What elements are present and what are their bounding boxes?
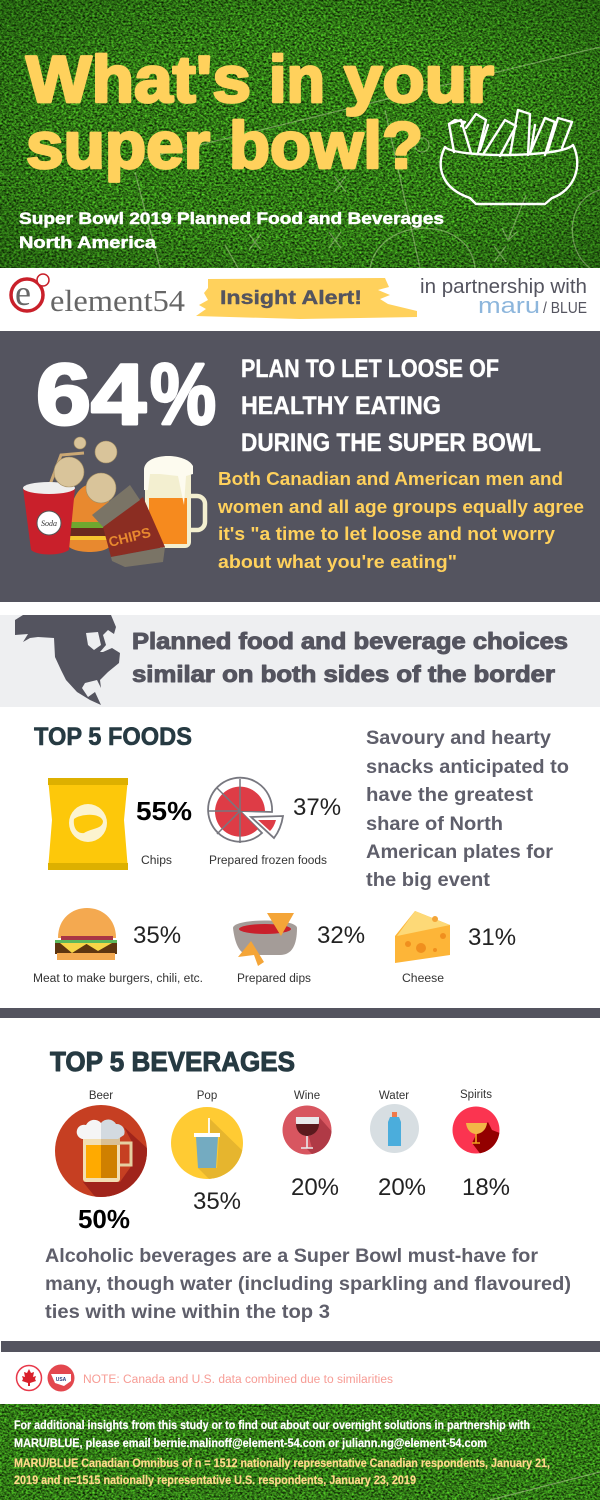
popcorn xyxy=(54,437,117,503)
note text: NOTE: Canada and U.S. data combined due to similarities xyxy=(83,1374,393,1386)
item: spirits: Spirits xyxy=(460,1089,492,1101)
chips bag: CHIPS xyxy=(107,524,152,550)
item: water: Water xyxy=(379,1090,409,1102)
icon: North America map xyxy=(15,615,120,705)
body text: women and all age groups equally agree xyxy=(217,496,584,517)
heading: HEALTHY EATING xyxy=(241,392,441,420)
side text: have the greatest xyxy=(366,785,534,806)
soda cup: Soda xyxy=(41,519,57,528)
logo: element54: element54 xyxy=(50,283,186,318)
note row xyxy=(16,1364,393,1392)
item: dips: Prepared dips xyxy=(237,973,311,985)
item: beer xyxy=(55,1090,147,1228)
body text xyxy=(45,1246,571,1323)
item: burgers: Meat to make burgers, chili, etc. xyxy=(33,973,203,985)
illustration: party food xyxy=(23,437,205,567)
logo: element54 xyxy=(11,273,186,318)
subtitle: North America xyxy=(19,233,157,252)
item: burgers: 35% xyxy=(133,922,181,949)
soda cup xyxy=(23,453,84,554)
icon: USA xyxy=(48,1364,74,1392)
item: frozen foods xyxy=(208,778,341,867)
logo: element54: e xyxy=(15,273,31,313)
icon: USA: USA xyxy=(56,1377,67,1383)
item: frozen foods: Prepared frozen foods xyxy=(209,855,327,867)
side text xyxy=(366,728,569,891)
item: pop: 35% xyxy=(193,1188,241,1215)
item: pop xyxy=(171,1090,243,1209)
title: bowl? xyxy=(229,108,423,182)
contact text: MARU/BLUE, please email bernie.malinoff@element-54.com or juliann.ng@element-54.com xyxy=(14,1436,487,1450)
panel: grass header xyxy=(0,0,600,268)
field play diagram xyxy=(135,47,600,268)
item: chips xyxy=(48,778,192,870)
title: super xyxy=(26,108,210,182)
title xyxy=(26,42,494,182)
subtitle xyxy=(19,209,444,252)
source text xyxy=(14,1456,550,1487)
panel: top 5 beverages xyxy=(45,1046,571,1323)
icon: bowl of snacks xyxy=(441,110,577,204)
item: cheese: 31% xyxy=(468,924,516,951)
item: dips xyxy=(233,913,365,985)
panel: top 5 foods xyxy=(33,723,569,985)
item: pop: Pop xyxy=(197,1090,217,1102)
body text xyxy=(217,468,584,572)
body text: Both Canadian and American men and xyxy=(218,468,563,489)
heading: TOP 5 BEVERAGES xyxy=(50,1046,295,1077)
big number xyxy=(36,347,216,443)
item: spirits: 18% xyxy=(462,1174,510,1201)
heading: PLAN TO LET LOOSE OF xyxy=(241,355,499,383)
item: beer: 50% xyxy=(78,1204,130,1234)
callout: insight alert xyxy=(196,278,417,319)
item: chips: 55% xyxy=(136,796,192,826)
side text: share of North xyxy=(366,814,503,835)
item: frozen foods: 37% xyxy=(293,794,341,821)
big number: 64 xyxy=(36,347,146,443)
logo: partnership with maru/BLUE: / BLUE xyxy=(543,300,587,317)
heading xyxy=(132,628,568,687)
item: chips: Chips xyxy=(141,855,172,867)
source text: MARU/BLUE Canadian Omnibus of n = 1512 nationally representative Canadian respondents, January 21, xyxy=(14,1456,550,1470)
chips bag xyxy=(92,485,165,567)
body text: Alcoholic beverages are a Super Bowl must-have for xyxy=(45,1246,539,1267)
side text: Savoury and hearty xyxy=(366,728,551,749)
subtitle: Super Bowl 2019 Planned Food and Beverages xyxy=(19,209,444,228)
logo: partnership with maru/BLUE: in partnership with xyxy=(420,276,587,298)
item: burgers xyxy=(33,908,203,985)
side text: snacks anticipated to xyxy=(366,757,569,778)
item: wine: Wine xyxy=(294,1090,320,1102)
body text: ties with wine within the top 3 xyxy=(45,1302,330,1323)
side text: the big event xyxy=(366,870,491,891)
heading: Planned food and beverage choices xyxy=(132,628,568,654)
item: dips: 32% xyxy=(317,922,365,949)
body text: about what you're eating" xyxy=(218,551,457,572)
logo: partnership with maru/BLUE xyxy=(420,276,587,318)
logo: partnership with maru/BLUE: maru xyxy=(478,293,540,318)
side text: American plates for xyxy=(366,842,554,863)
item: cheese xyxy=(395,911,516,985)
panel: map heading strip xyxy=(0,615,600,707)
panel: grass footer xyxy=(0,1404,600,1500)
heading: TOP 5 FOODS xyxy=(34,723,192,751)
burger xyxy=(68,484,112,552)
item: water: 20% xyxy=(378,1174,426,1201)
title: What's xyxy=(26,42,251,116)
icon: Canada xyxy=(16,1366,42,1390)
heading: DURING THE SUPER BOWL xyxy=(241,429,541,457)
item: spirits xyxy=(452,1089,510,1201)
heading xyxy=(241,355,541,457)
callout: insight alert: Insight Alert! xyxy=(220,288,362,309)
heading: similar on both sides of the border xyxy=(132,661,555,687)
source text: 2019 and n=1515 nationally representative U.S. respondents, January 23, 2019 xyxy=(14,1473,416,1487)
contact text: For additional insights from this study or to find out about our overnight solutions in partnership with xyxy=(14,1418,530,1432)
title: in xyxy=(269,42,325,116)
panel: 64 percent xyxy=(0,331,600,602)
big number: % xyxy=(150,347,216,443)
item: cheese: Cheese xyxy=(402,973,444,985)
item: beer: Beer xyxy=(89,1090,113,1102)
beer mug xyxy=(144,456,205,548)
item: wine: 20% xyxy=(291,1174,339,1201)
panel: logo band xyxy=(11,273,587,319)
title: your xyxy=(344,42,494,116)
body text: many, though water (including sparkling and flavoured) xyxy=(45,1274,571,1295)
item: water xyxy=(370,1090,426,1201)
body text: it's "a time to let loose and not worry xyxy=(218,523,556,544)
contact text xyxy=(14,1418,530,1450)
item: wine xyxy=(282,1090,339,1201)
